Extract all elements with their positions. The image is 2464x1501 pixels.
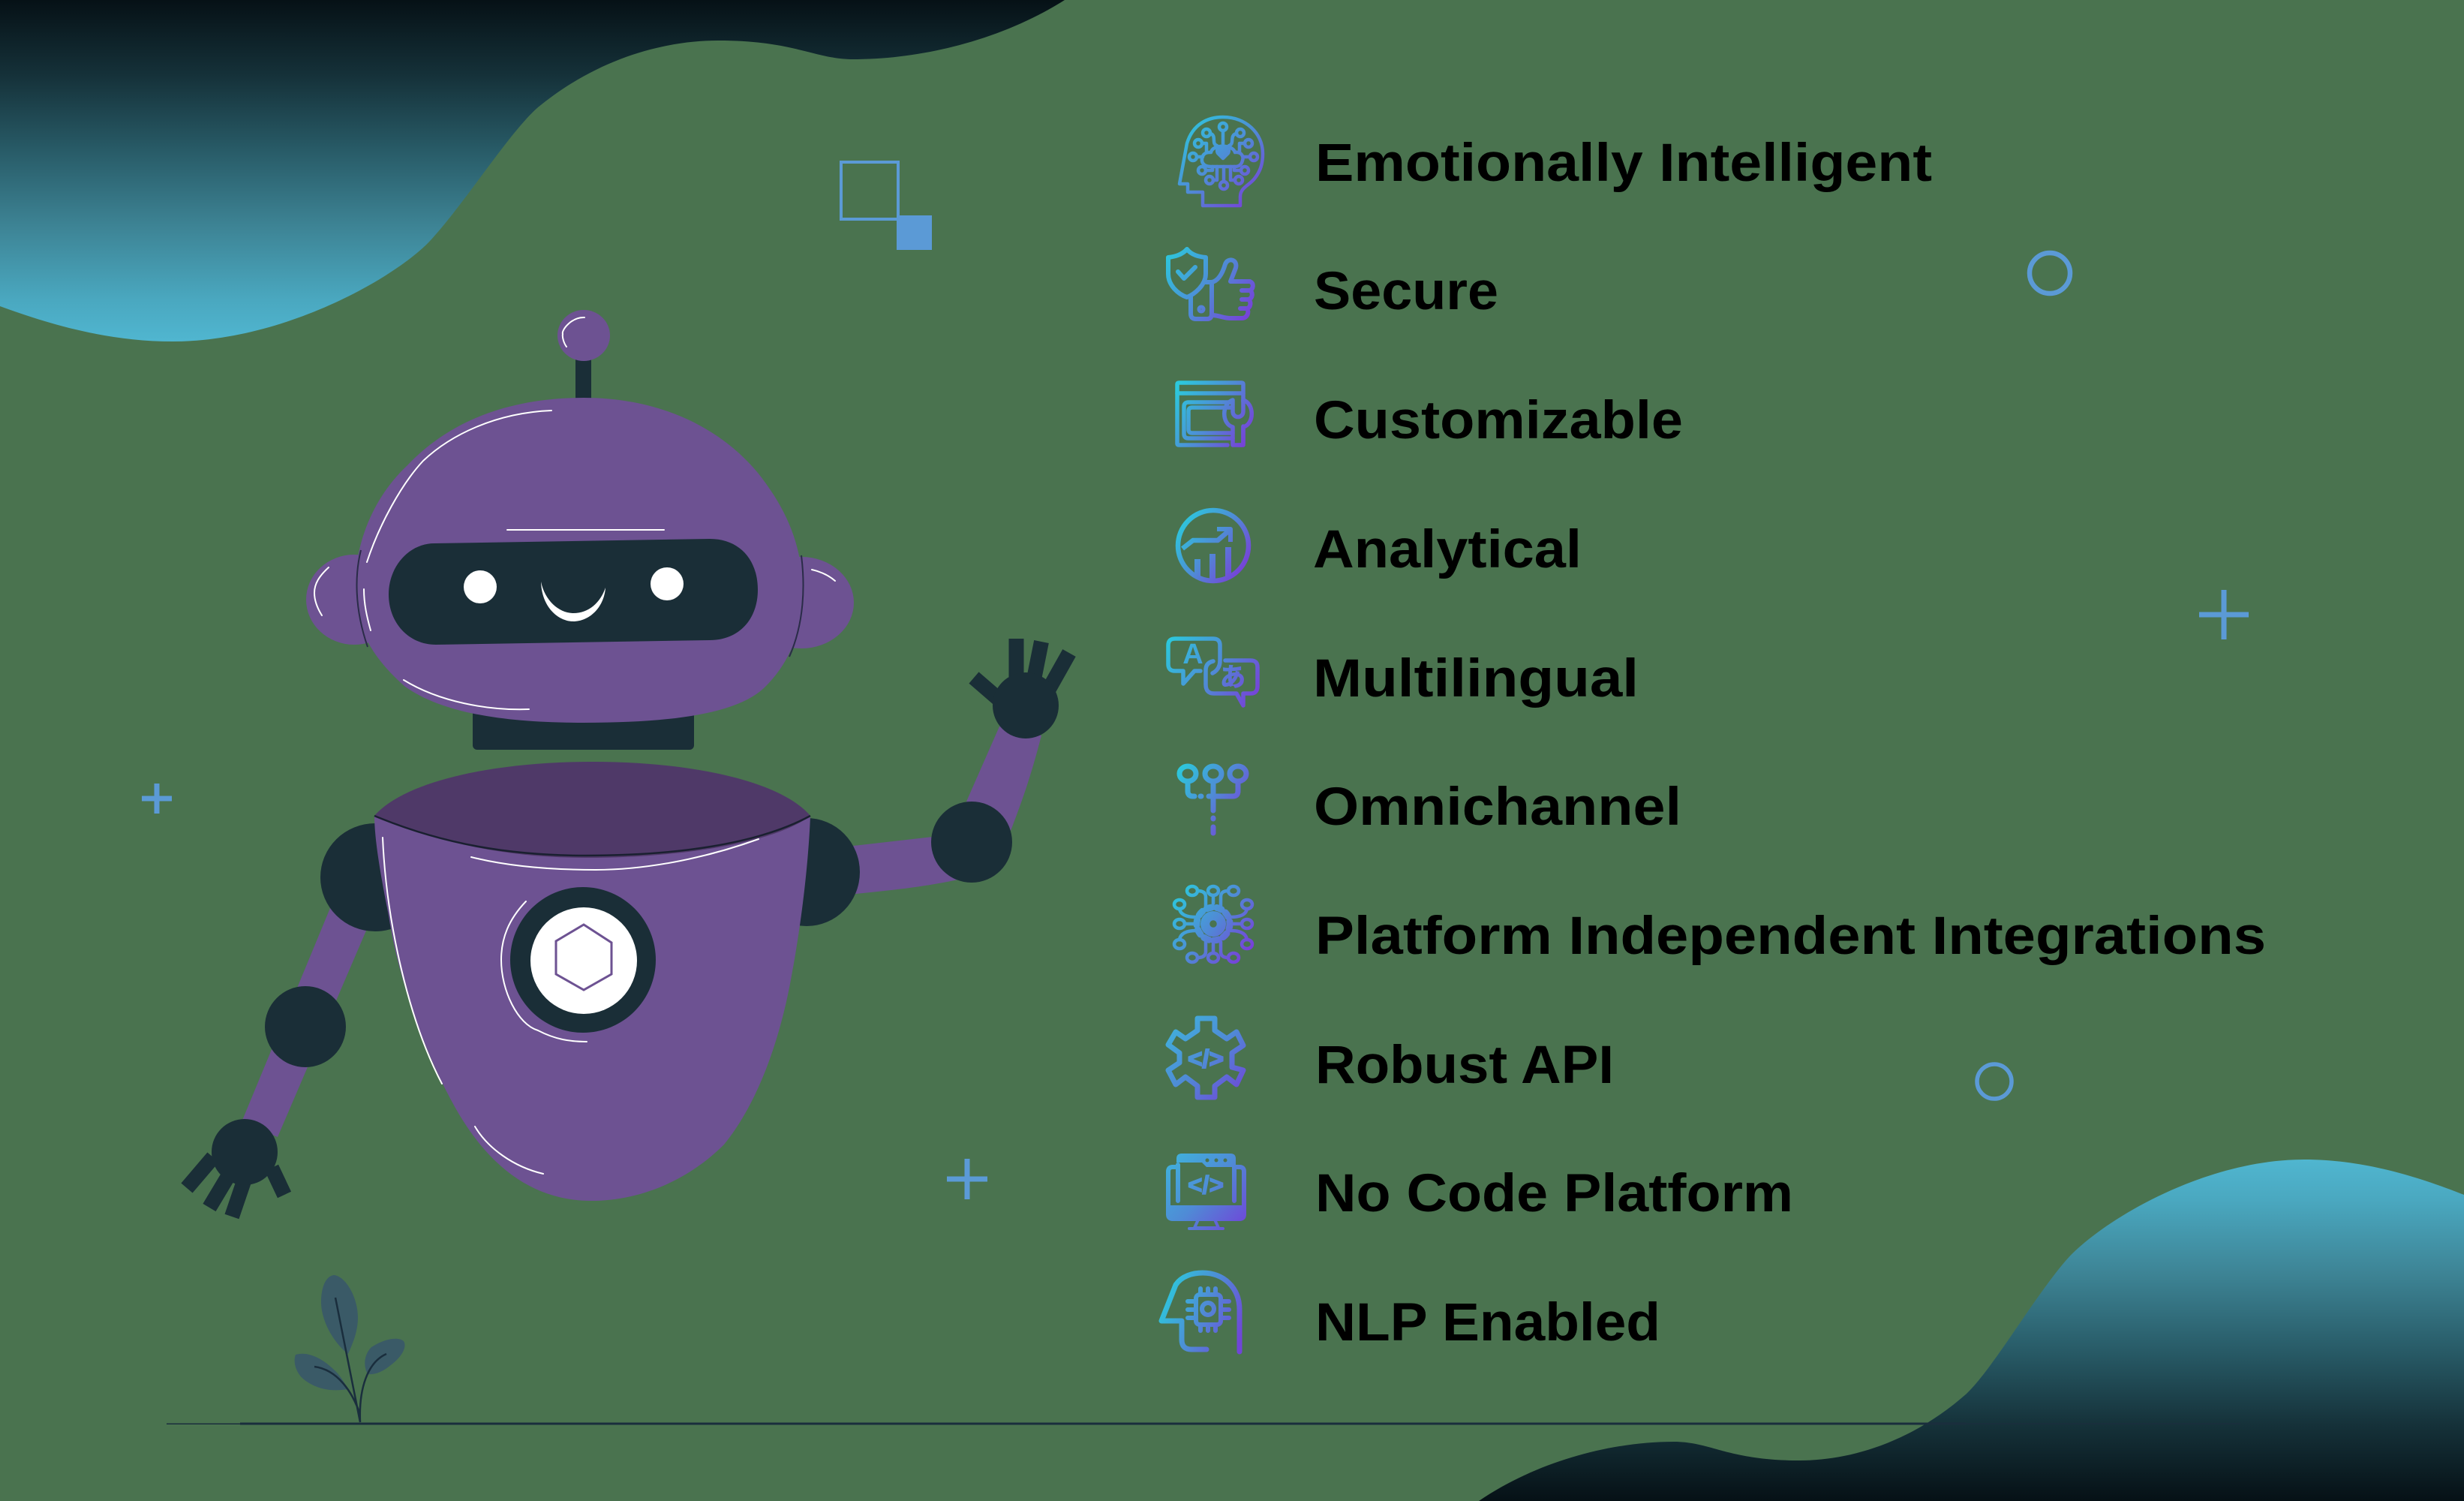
icon: omnichannel: [1179, 766, 1246, 833]
label: Emotionally Intelligent: Emotionally Intelligent: [1315, 134, 1932, 193]
icon: shield and thumbs up: [1168, 249, 1253, 319]
icon: robust API gear: [1168, 1018, 1243, 1097]
icon: NLP head with chip: [1161, 1273, 1240, 1352]
label: NLP Enabled: NLP Enabled: [1315, 1293, 1660, 1352]
antenna: [557, 310, 610, 401]
neck: [473, 698, 694, 750]
decor: plus right: [2199, 590, 2249, 639]
right ear: [749, 557, 854, 648]
right hand: [974, 639, 1069, 738]
left hand: [187, 1119, 284, 1217]
chest medallion: [510, 887, 656, 1033]
label: Customizable: Customizable: [1314, 391, 1683, 450]
left arm: [242, 908, 366, 1137]
label: No Code Platform: No Code Platform: [1315, 1164, 1793, 1223]
decor: circle top right: [2030, 253, 2070, 293]
list: feature labels: [1313, 134, 2266, 1352]
left ear: [306, 555, 402, 645]
decor: outlined and filled squares: [841, 162, 932, 250]
robot: [187, 310, 1069, 1217]
bottom-right gradient wave: [1479, 1160, 2464, 1501]
label: Secure: Secure: [1314, 262, 1498, 321]
label: Omnichannel: Omnichannel: [1314, 778, 1681, 837]
label: Multilingual: Multilingual: [1313, 649, 1639, 708]
right arm: [853, 726, 1041, 894]
icon: robust API gear: </>: [1188, 1045, 1224, 1072]
icon: customizable window with wrench: [1177, 383, 1252, 445]
decor: plus left: [142, 784, 172, 814]
icon: multilingual speech bubbles: [1168, 639, 1258, 705]
decor: small circle: [1977, 1064, 2012, 1099]
label: Robust API: Robust API: [1315, 1036, 1614, 1095]
ground line: [167, 1423, 2240, 1424]
decor: plus center: [947, 1159, 987, 1199]
label: Analytical: Analytical: [1313, 520, 1582, 579]
shoulders: [320, 818, 860, 931]
top-left gradient wave: [0, 0, 1065, 341]
icon: no code monitor: [1167, 1154, 1246, 1229]
plant: [295, 1275, 405, 1422]
icon: no code monitor: </>: [1188, 1171, 1224, 1199]
visor: [389, 539, 758, 645]
icon: multilingual speech bubbles: A: [1182, 639, 1203, 670]
icon: platform integrations gear: [1174, 886, 1252, 962]
icon: multilingual speech bubbles: あ: [1220, 663, 1246, 692]
torso: [374, 762, 810, 1201]
label: Platform Independent Integrations: Platform Independent Integrations: [1315, 907, 2266, 966]
head: [355, 398, 804, 723]
icon: emotional brain head: [1179, 117, 1263, 206]
icon: analytics circle: [1178, 510, 1249, 581]
